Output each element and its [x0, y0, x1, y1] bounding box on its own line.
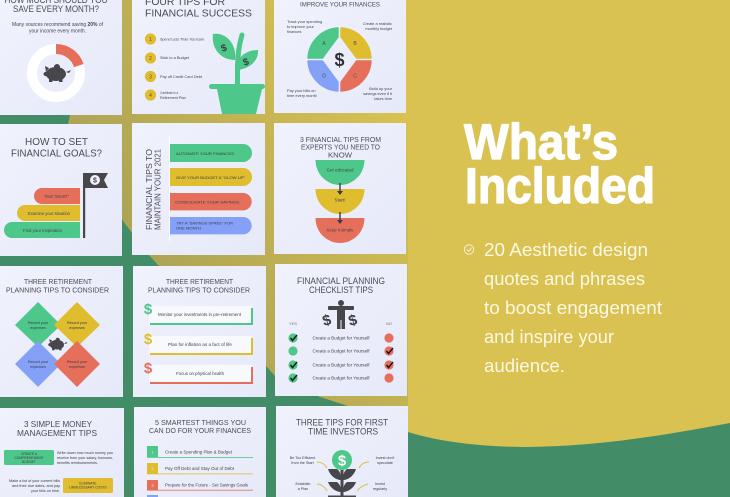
tip text: income: benefits reimbursements. [57, 461, 98, 465]
heading: CAN DO FOR YOUR FINANCES [149, 426, 251, 435]
four diamonds: expenses [69, 365, 85, 369]
panel: how to set financial goals [0, 124, 122, 256]
card: monitor investments: $ [144, 301, 153, 318]
quadrant labels: savings even if it [363, 91, 393, 96]
heading: 3 SIMPLE MONEY [24, 419, 92, 429]
title: what's included: What’s [464, 114, 618, 170]
list: four numbered tips: Contribute to a [160, 90, 179, 95]
list item 3: Prepare for the Future - Set Savings Goals [165, 482, 248, 488]
four pills: GIVE YOUR BUDGET A "GLOW UP" [176, 176, 246, 180]
heading [296, 418, 388, 436]
four pills [170, 144, 252, 234]
card: plan for inflation: $ [144, 331, 153, 348]
labels: speculate [377, 461, 393, 465]
list: four numbered tips: Stick to a Budget [160, 55, 190, 60]
heading: CHECKLIST TIPS [309, 285, 373, 295]
heading: KNOW [328, 150, 352, 159]
four diamonds: expenses [30, 365, 46, 369]
background: green wave [0, 115, 730, 497]
tip box: yellow: ELIMINATE [79, 482, 97, 486]
tip text: bills: Make a list of your current bills [9, 479, 60, 483]
four diamonds: expenses [69, 326, 85, 330]
vertical heading: FINANCIAL TIPS TO [144, 149, 154, 230]
panel: three tips for first time investors [276, 406, 408, 497]
list item 1: 1 [151, 450, 154, 454]
heading [297, 276, 385, 295]
four diamonds: Record your [67, 321, 88, 325]
four diamonds [15, 302, 100, 387]
icon: piggy bank [44, 64, 71, 82]
quadrant labels: Pay your bills on [287, 88, 316, 93]
tip text: bills [9, 479, 60, 493]
heading: HOW TO SET [25, 136, 89, 148]
icon: plant in pot [209, 34, 265, 114]
card: physical health: Focus on physical health [176, 371, 225, 376]
tip box: green: BUDGET [22, 460, 36, 464]
quadrant labels [287, 19, 393, 101]
list item 2 [147, 463, 253, 474]
labels: Be Too Efficient [290, 456, 315, 460]
quadrant labels: Build up your [369, 86, 393, 91]
panel: four tips for financial success [132, 0, 265, 114]
list item 4 [147, 495, 158, 497]
body text: audience. [484, 355, 565, 376]
pie diagram with four segments: A [322, 41, 326, 47]
pie diagram with four segments: $ [334, 50, 345, 70]
half circle flow [316, 160, 364, 243]
list item 2: 2 [151, 466, 154, 471]
list item 1: Create a Spending Plan & Budget [165, 450, 233, 454]
panel: 3 financial tips from experts [274, 123, 406, 254]
heading [149, 418, 251, 435]
column labels [289, 321, 392, 326]
column labels: YES [289, 321, 297, 326]
card: plan for inflation: Plan for inflation as a fact of life [168, 342, 233, 347]
heading: FINANCIAL GOALS? [11, 148, 102, 160]
quadrant labels: finances [287, 29, 302, 34]
heading [4, 0, 108, 15]
card: plan for inflation [144, 331, 253, 355]
icon: check circle [464, 245, 474, 254]
tip text: bills: and their due dates, and pay [12, 484, 60, 488]
card: physical health [144, 360, 253, 384]
panel: how much should you save [0, 0, 122, 115]
four pills: AUTOMATE YOUR FINANCES [176, 152, 235, 156]
tip box: green [4, 450, 54, 465]
vertical heading: MAINTAIN YOUR 2021 [152, 149, 162, 230]
heading: PLANNING TIPS TO CONSIDER [6, 286, 109, 294]
labels: Invest don't [376, 456, 394, 460]
quadrant labels: monthly budget [365, 26, 393, 31]
half circle flow: Keep it simple [326, 228, 354, 232]
decorative vertical line [169, 136, 170, 241]
labels: regularly [373, 487, 387, 491]
checklist rows: Create a Budget for Yourself [312, 362, 370, 368]
tip text: income: Write down how much money you [57, 451, 113, 455]
list item 1 [147, 446, 253, 458]
stepped bars: Think "SMART" [44, 194, 69, 199]
list: four numbered tips: Retirement Plan [160, 95, 186, 100]
list: four numbered tips: 4 [149, 93, 152, 99]
labels: from the Start [291, 461, 314, 465]
stepped bars [4, 188, 80, 238]
stepped bars: Examine your situation [28, 211, 71, 216]
icon: person with dollars [321, 300, 360, 330]
heading: PLANNING TIPS TO CONSIDER [148, 286, 250, 294]
title: what's included: Included [465, 158, 655, 214]
four pills: CONSOLIDATE YOUR SAVINGS [175, 200, 240, 204]
four pills: TRY A "SAVINGS SPREE" FOR [176, 222, 233, 226]
quadrant labels: to improve your [287, 24, 315, 29]
list item 3 [147, 480, 253, 491]
four diamonds: expenses [30, 326, 46, 330]
heading: FINANCIAL PLANNING [297, 276, 385, 286]
pie diagram with four segments: C [353, 74, 357, 80]
quadrant labels: Track your spending [287, 19, 322, 24]
heading: IMPROVE YOUR FINANCES [300, 2, 381, 8]
heading: 3 FINANCIAL TIPS FROM [300, 135, 381, 144]
heading: EXPERTS YOU NEED TO [301, 142, 380, 152]
icon: person with dollars: $ [347, 311, 360, 330]
heading: MANAGEMENT TIPS [17, 428, 97, 438]
labels: a Plan [298, 487, 308, 491]
card: monitor investments: Monitor your investments in pre-retirement [158, 312, 242, 317]
heading: THREE RETIREMENT [24, 277, 93, 286]
body text: quotes and phrases [484, 268, 645, 289]
icon: coin plant: $ [338, 452, 347, 470]
heading [6, 277, 109, 294]
tip box: yellow: UNNECESSARY COSTS [69, 486, 107, 490]
text block: your income every month. [29, 28, 86, 34]
four diamonds: Record your [28, 360, 49, 364]
panel: three retirement planning tips cards [133, 266, 266, 397]
pie diagram with four segments: B [353, 41, 357, 47]
tip box: green: CREATE A [21, 452, 38, 456]
icon: person with dollars: $ [321, 311, 334, 330]
panel: financial tips to maintain [132, 123, 265, 255]
heading: FINANCIAL SUCCESS [145, 8, 252, 20]
checklist rows [288, 333, 394, 383]
body text: to boost engagement [484, 297, 662, 318]
tip text: bills: your bills on time. [31, 489, 60, 493]
heading: THREE RETIREMENT [166, 277, 234, 286]
labels: Invest [375, 482, 385, 486]
icon: piggy bank [48, 338, 68, 350]
four diamonds: Record your [28, 321, 49, 325]
arrows [337, 183, 343, 224]
column labels: NO [386, 321, 392, 326]
half circle flow: Start! [334, 198, 346, 202]
body text: and inspire your [484, 326, 614, 347]
labels [290, 456, 394, 491]
tip text: income [57, 451, 113, 465]
vertical heading [144, 149, 162, 230]
background: right yellow area [408, 0, 730, 497]
heading [300, 135, 381, 159]
heading: THREE TIPS FOR FIRST [296, 418, 388, 428]
panel: 3 simple money management tips [0, 408, 124, 497]
list: four numbered tips: Spend Less Than You Earn [160, 36, 204, 42]
heading [17, 419, 97, 438]
heading: SAVE EVERY MONTH? [13, 4, 99, 15]
list item 2: Pay Off Debt and Stay Out of Debt [165, 466, 235, 471]
list item 3: 3 [151, 482, 154, 488]
list: four numbered tips: Pay off Credit Card Debt [160, 74, 203, 79]
panel: 5 smartest things [134, 407, 266, 497]
heading [145, 0, 252, 20]
panel: three retirement planning tips diamonds [0, 266, 123, 397]
heading: 5 SMARTEST THINGS YOU [155, 418, 246, 427]
quadrant labels: Create a realistic [363, 21, 392, 26]
heading [148, 277, 250, 294]
panel: financial planning checklist tips [275, 264, 407, 396]
donut chart 20% [32, 49, 80, 97]
list: four numbered tips: 3 [149, 74, 152, 80]
panel: improve your finances [274, 0, 406, 113]
curved arrows [317, 462, 369, 491]
half circle flow: Get educated [326, 168, 354, 172]
list: four numbered tips [145, 33, 204, 101]
tip box: yellow [63, 478, 113, 493]
four pills: ONE MONTH [176, 226, 201, 230]
four diamonds: Record your [67, 360, 88, 364]
card: monitor investments [144, 301, 253, 325]
checklist rows: Create a Budget for Yourself [312, 348, 370, 354]
body text [484, 239, 662, 376]
pie diagram with four segments [308, 28, 371, 91]
checklist rows: Create a Budget for Yourself [312, 376, 370, 380]
text block [12, 22, 104, 34]
pie diagram with four segments: D [322, 74, 326, 80]
labels: Establish [296, 482, 310, 486]
icon: plant in pot: $ [242, 56, 251, 69]
heading: TIME INVESTORS [308, 426, 378, 436]
title: what's included [464, 114, 655, 214]
tip text: income: receive from your salary, bonuses, [57, 456, 113, 460]
quadrant labels: time every month [287, 93, 317, 98]
icon: flag with dollar: $ [93, 178, 97, 184]
card: physical health: $ [144, 360, 153, 377]
tip box: green: COMPREHENSIVE [15, 456, 44, 460]
list: four numbered tips: 2 [149, 56, 152, 62]
text block: Many sources recommend saving 20% of [12, 22, 104, 28]
heading [11, 136, 102, 160]
icon: plant in pot: $ [220, 42, 229, 55]
stepped bars: Find your inspiration [23, 228, 63, 233]
body text: 20 Aesthetic design [484, 239, 648, 260]
checklist rows: Create a Budget for Yourself [312, 336, 370, 340]
list: four numbered tips: 1 [149, 37, 152, 43]
quadrant labels: takes time [374, 96, 392, 101]
